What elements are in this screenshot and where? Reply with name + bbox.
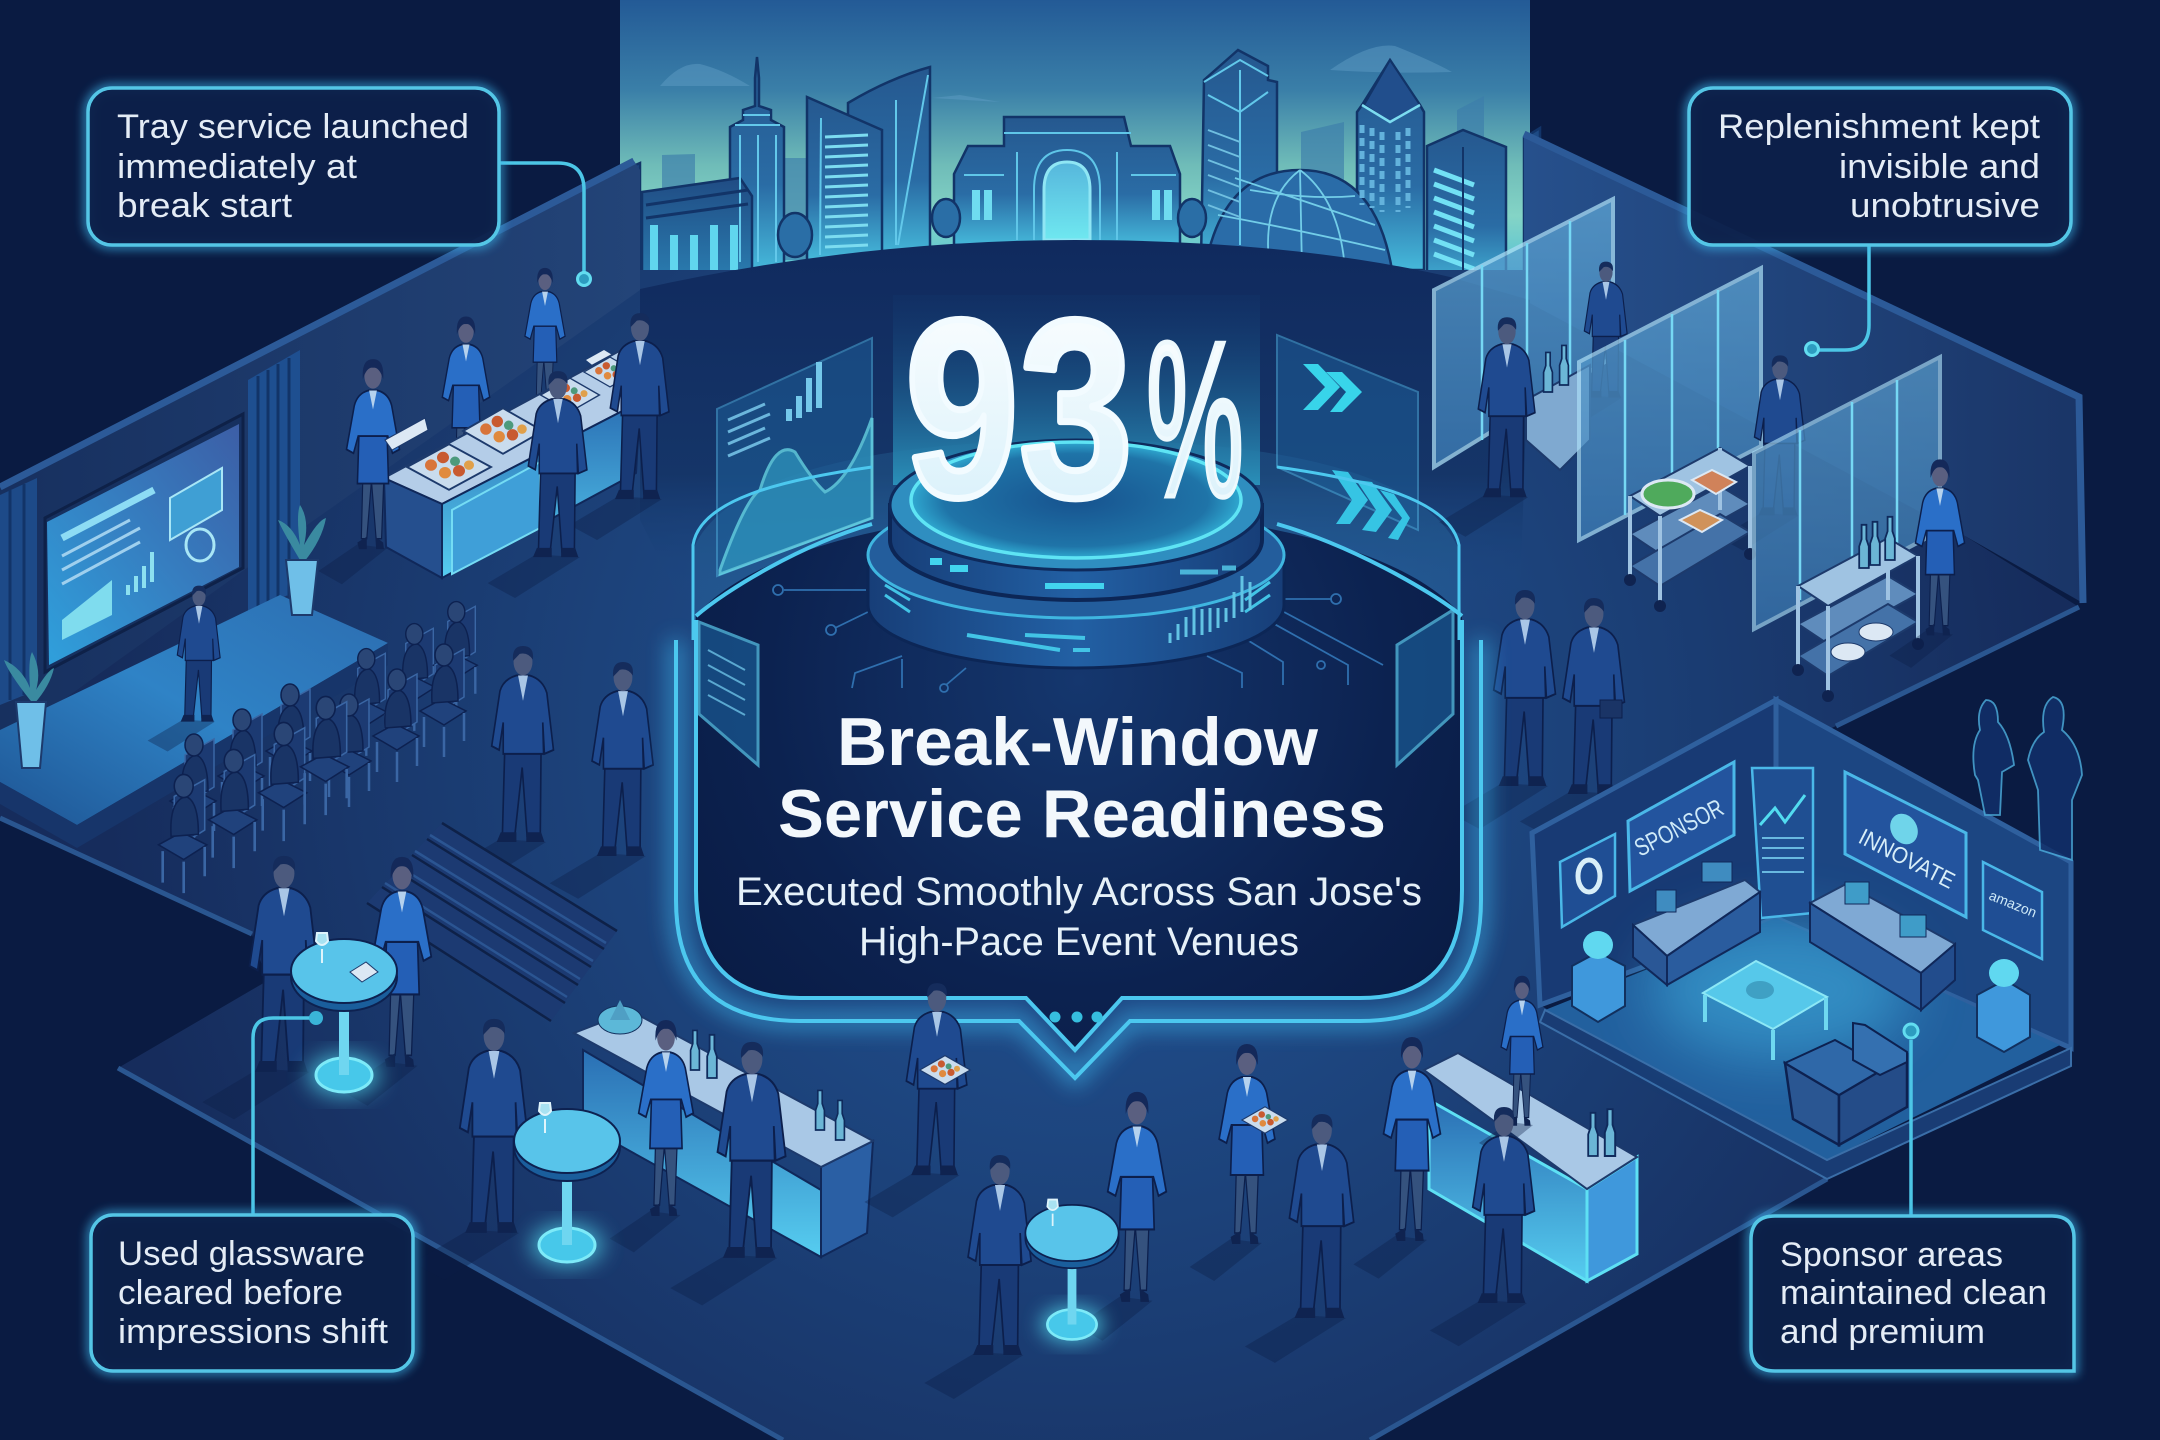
box glow [1751,1216,2074,1371]
innovate screen: INNOVATE [1855,823,1959,894]
text [118,1235,389,1351]
text: Used glassware [118,1235,365,1273]
subtitle: Executed Smoothly Across San Jose's [736,870,1422,914]
heading: Break-Window [837,704,1319,780]
anchor dot [1806,342,1818,356]
box glow [1689,88,2071,245]
big number 93%: 93 [905,267,1133,550]
text: invisible and [1839,148,2040,186]
callout: replenishment [1689,88,2071,356]
box [88,88,499,245]
text: impressions shift [118,1313,389,1351]
text [1780,1236,2047,1351]
central KPI panel: % [1146,296,1244,544]
panel interior [696,510,1462,1050]
text: maintained clean [1780,1274,2047,1312]
chart panel left [717,338,872,576]
subtitle: High-Pace Event Venues [859,920,1299,964]
panel glow [676,640,1481,1078]
trees [778,199,1206,257]
stage curtains [0,350,300,705]
chevron panel right [1277,335,1418,540]
pedestals [1572,931,2030,1052]
cart 2 with food [1624,448,1756,612]
silhouette couple [1973,697,2082,860]
text [1718,108,2041,225]
connector [253,1018,312,1215]
plant left [4,652,54,768]
callout: tray service [88,88,590,286]
panel: partition 1 [1434,199,1613,467]
box glow [88,88,499,245]
cocktail table centre and guests [924,1044,1354,1399]
floor [0,270,2079,1440]
sponsor screen [1628,762,1734,891]
box [1689,88,2071,245]
heading [778,704,1386,852]
cart 3 with plates [1792,517,1924,702]
audience seating [158,602,477,893]
circuit traces [773,585,1383,692]
curved lower side panels [699,610,1453,765]
text [117,108,469,225]
cart 1 [1526,345,1590,470]
heading: Service Readiness [778,776,1386,852]
wall: left hall wall [0,161,640,760]
mini bar left [574,1000,873,1305]
sponsor booth [1532,700,2071,1179]
amazon panel: amazon [1987,887,2039,920]
text: and premium [1780,1313,1985,1351]
logo panel [1560,834,1615,927]
neon outlines [676,467,1481,1078]
callout: glassware [91,1011,413,1371]
anchor dot [1904,1024,1918,1038]
panel: partition 3 [1754,357,1940,629]
projection screen [45,414,243,672]
tall banner [1752,768,1813,918]
sponsor screen: SPONSOR [1630,794,1728,862]
pedestal [868,440,1284,668]
text: cleared before [118,1274,343,1312]
text: Sponsor areas [1780,1236,2003,1274]
dark central backdrop [640,240,1530,600]
box glow [91,1215,413,1371]
standing guests left [449,646,653,899]
wall: right hall wall [1524,134,2083,603]
panel: partition 2 [1579,268,1761,540]
catering buffet station [318,268,669,598]
anchor dot [578,272,590,286]
server with tray [864,983,970,1217]
callout: sponsor areas [1751,1024,2074,1371]
connector [500,163,584,276]
sofa [1785,1023,1907,1145]
cylinder back glass [693,440,1462,640]
text: immediately at [117,148,358,186]
pager dots [1050,1012,1102,1022]
box [1751,1216,2074,1371]
cocktail table centre left [413,1019,620,1280]
text: Tray service launched [117,108,469,146]
glass card behind number [893,295,1260,485]
handshake pair [1451,590,1624,837]
connector [1909,1040,1913,1216]
left counter [1633,862,1760,985]
buffet counter [384,348,640,578]
skyline: San Jose city view [620,0,1540,300]
plant by screen [278,505,326,615]
subtitle [736,870,1422,964]
stage platform [0,595,388,848]
box [91,1215,413,1371]
presenter [148,586,220,752]
anchor dot [309,1011,323,1025]
text: unobtrusive [1850,187,2040,225]
stairs [367,823,617,1021]
left stage area [0,350,388,848]
right partition and replenishment zone [1434,199,1965,702]
glass coffee table [1703,961,1827,1060]
cocktail table group left [202,856,431,1119]
central KPI panel [676,267,1481,1078]
connector [1815,245,1869,350]
text: break start [117,187,293,225]
amazon panel [1983,862,2042,959]
innovate screen [1845,772,1966,917]
text: Replenishment kept [1718,108,2041,146]
service bar right [1353,976,1637,1346]
right counter [1810,882,1955,1010]
